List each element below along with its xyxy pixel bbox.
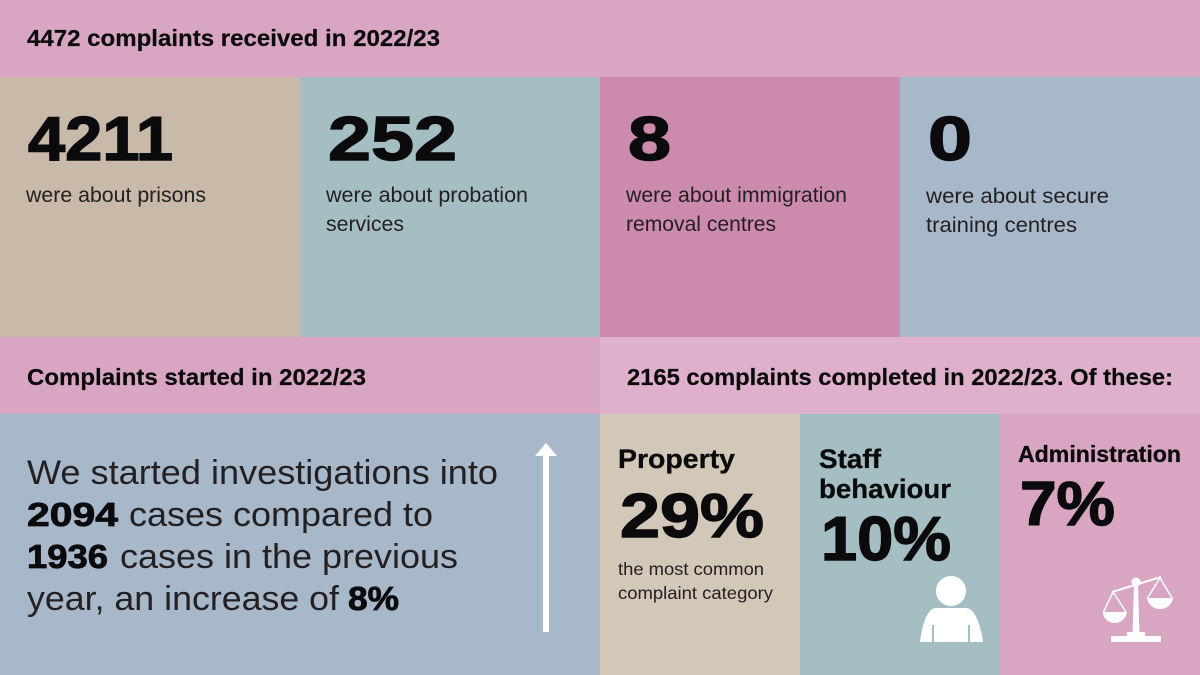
number: 7%: 7% [1020,470,1115,539]
text: probation caption: services [326,212,404,236]
arrow: upward increase [535,443,557,632]
text: probation caption [325,183,528,236]
number: 0: 0 [928,105,972,174]
panel: immigration removal centres [600,77,900,337]
number: 4211: 4211 [28,105,173,174]
text block: investigations statement: 1936 [27,538,108,575]
text: prisons caption: were about prisons [25,183,206,207]
text block: investigations statement: cases in the previous [120,538,458,576]
text block: investigations statement: We started investigations into [27,454,498,492]
number: 29%: 29% [620,482,764,551]
label: administration: Administration [1018,441,1181,467]
panel: probation services [300,77,600,337]
panel: prisons [0,77,300,337]
heading: complaints completed: 2165 complaints completed in 2022/23. Of these: [627,364,1173,390]
label: staff behaviour [819,444,952,504]
icon: person [920,576,983,642]
text: secure training caption: were about secure [925,184,1109,208]
label: property: Property [618,444,735,474]
heading: complaints received: 4472 complaints received in 2022/23 [27,25,440,51]
number: 8: 8 [628,105,671,174]
text: immigration caption: removal centres [626,212,776,236]
panel: staff behaviour [800,414,1000,675]
panel: complaints completed header [600,337,1200,414]
panel: administration [1000,414,1200,675]
panel: secure training centres [900,77,1200,337]
number: 10%: 10% [821,505,951,574]
number: 252: 252 [328,105,457,174]
text block: investigations statement: cases compared to [129,496,433,534]
heading: complaints started: Complaints started in 2022/23 [27,364,366,390]
text block: investigations statement: 8% [348,580,399,617]
panel: property [600,414,800,675]
text: secure training caption [925,184,1109,237]
panel: complaints started header [0,337,600,414]
icon: scales [1103,577,1173,642]
text block: investigations statement [27,454,498,618]
text: immigration caption [625,183,847,236]
text: most common category [618,559,773,603]
text: most common category: complaint category [618,583,773,603]
text: most common category: the most common [618,559,764,579]
text block: investigations statement: year, an increase of [27,580,340,618]
text block: investigations statement: 2094 [27,496,119,533]
panel: total complaints header [0,0,1200,77]
label: staff behaviour: behaviour [819,474,952,504]
text: probation caption: were about probation [325,183,528,207]
text: immigration caption: were about immigration [625,183,847,207]
label: staff behaviour: Staff [819,444,882,474]
panel: investigations started [0,414,600,675]
text: secure training caption: training centres [926,213,1077,237]
